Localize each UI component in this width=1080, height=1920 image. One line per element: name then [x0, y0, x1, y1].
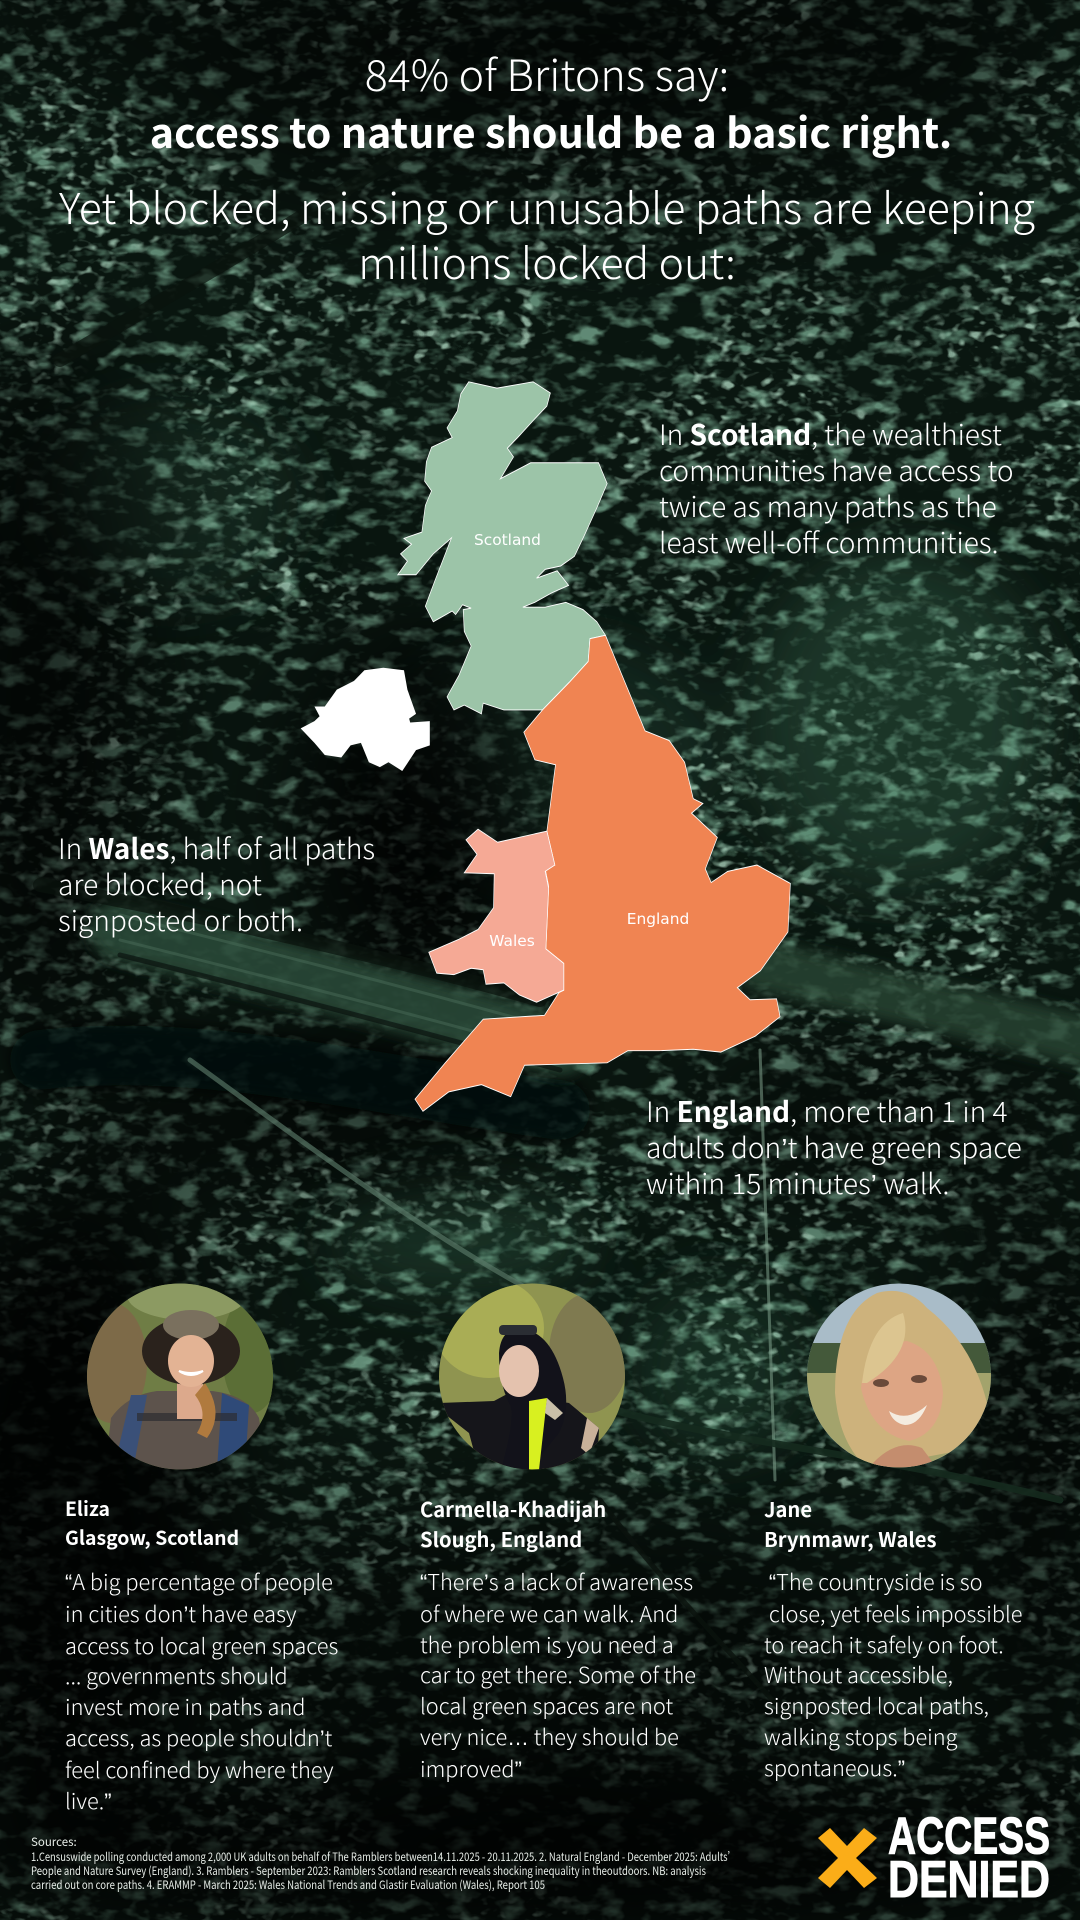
UK map: [300, 381, 791, 1112]
title: [59, 42, 1035, 292]
name: Eliza: [65, 1493, 110, 1522]
map label: England: England: [627, 910, 689, 928]
testimonial: Eliza: [65, 1493, 338, 1816]
sources: carried out on core paths. 4. ERAMMP - March 2025: Wales National Trends and Glastir Evaluation (Wales), Report 105: [31, 1877, 545, 1893]
quote: of where we can walk. And: [420, 1598, 678, 1629]
callout: Wales: are blocked, not: [58, 863, 262, 904]
quote: in cities don’t have easy: [65, 1598, 297, 1629]
callout: Wales: signposted or both.: [58, 899, 303, 940]
headline line 1: 84% of Britons say:: [365, 42, 729, 104]
Northern Ireland region: [301, 668, 430, 771]
sources: [31, 1834, 737, 1893]
subhead: millions locked out:: [358, 230, 736, 292]
quote: “A big percentage of people: [65, 1566, 333, 1597]
quote: “There’s a lack of awareness: [420, 1566, 693, 1597]
map label: Scotland: Scotland: [474, 531, 541, 549]
name: Jane: [764, 1494, 812, 1523]
quote: [420, 1566, 696, 1784]
testimonial: Jane: Brynmawr, Wales: [764, 1524, 936, 1553]
callout: England: In England, more than 1 in 4: [646, 1090, 1007, 1131]
callout: England: adults don’t have green space: [646, 1126, 1022, 1167]
quote: [65, 1566, 338, 1816]
quote: invest more in paths and: [65, 1691, 306, 1722]
quote: improved”: [420, 1753, 522, 1784]
callout: Scotland: [659, 413, 1014, 562]
testimonial: Carmella-Khadijah: [420, 1494, 696, 1784]
callout: Scotland: In Scotland, the wealthiest: [659, 413, 1002, 454]
quote: car to get there. Some of the: [420, 1659, 696, 1690]
quote: ... governments should: [65, 1660, 288, 1691]
portrait: Carmella-Khadijah: [439, 1284, 625, 1470]
testimonial: Carmella-Khadijah: Slough, England: [420, 1524, 582, 1553]
callout: Scotland: twice as many paths as the: [659, 485, 997, 526]
subhead: [59, 175, 1035, 292]
portrait: Jane: [807, 1284, 991, 1468]
icon: yellow X: [818, 1828, 877, 1888]
sources: Sources:: [31, 1834, 77, 1850]
testimonial: Eliza: Glasgow, Scotland: [65, 1522, 239, 1551]
callout: Scotland: communities have access to: [659, 449, 1014, 490]
callout: England: [646, 1090, 1022, 1203]
quote: local green spaces are not: [420, 1690, 673, 1721]
callout: Scotland: least well-off communities.: [659, 521, 999, 562]
quote: the problem is you need a: [420, 1629, 674, 1660]
callout: England: within 15 minutes’ walk.: [646, 1162, 949, 1203]
portrait: Eliza: [87, 1284, 984, 1470]
logo: Access Denied: [818, 1810, 1050, 1905]
quote: access, as people shouldn’t: [65, 1722, 332, 1753]
Wales region: [429, 829, 564, 1002]
map label: Wales: Wales: [489, 932, 535, 950]
quote: access to local green spaces: [65, 1630, 338, 1661]
England region: [415, 635, 790, 1111]
subhead: Yet blocked, missing or unusable paths are keeping: [59, 175, 1035, 237]
quote: feel confined by where they: [65, 1754, 334, 1785]
name: Carmella-Khadijah: [420, 1494, 606, 1523]
callout: Wales: In Wales, half of all paths: [58, 827, 375, 868]
callout: Wales: [58, 827, 375, 940]
quote: very nice… they should be: [420, 1721, 679, 1752]
quote: “The countryside is so close, yet feels impossible to reach it safely on foot. Without accessible, signposted local paths, walking stops being spontaneous.”: [764, 1566, 1023, 1783]
quote: live.”: [65, 1785, 112, 1816]
testimonial: Jane: [764, 1494, 1023, 1783]
Scotland region: [398, 382, 607, 714]
headline line 2: access to nature should be a basic right.: [150, 100, 952, 160]
